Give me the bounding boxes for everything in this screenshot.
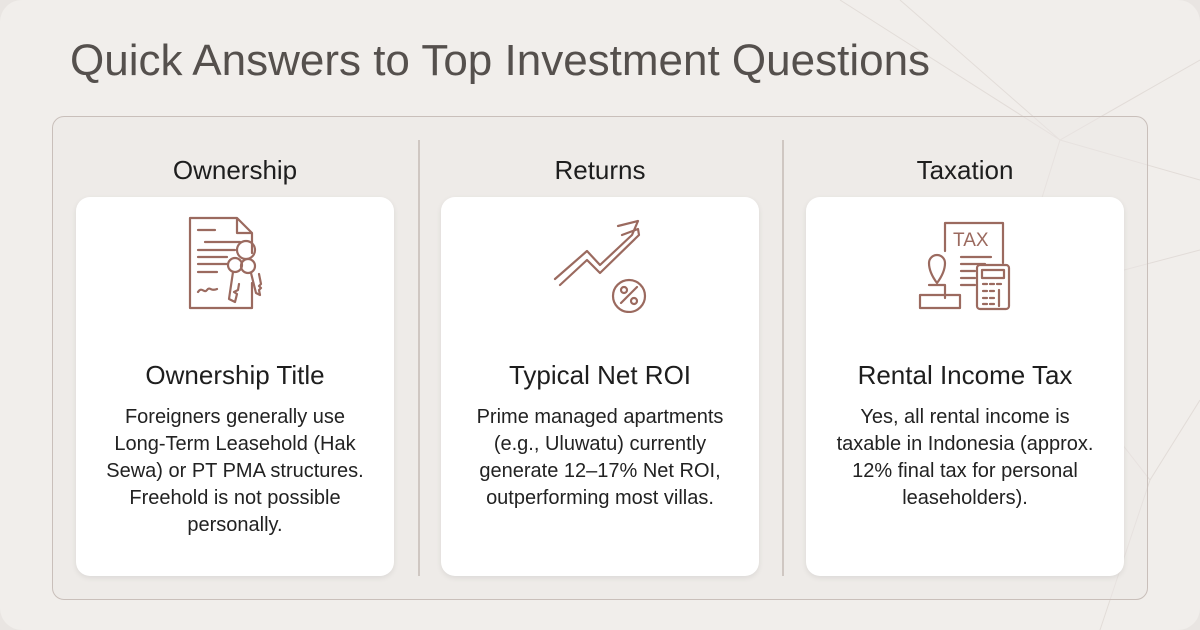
icon: rising arrow with percent [554,220,646,313]
title: Quick Answers to Top Investment Questions [70,36,930,85]
column: ownership [76,155,394,578]
card title: Rental Income Tax [858,360,1072,390]
icon: document with keys [188,216,262,310]
card: returns [441,197,759,576]
card: taxation [806,197,1124,576]
card text: Foreigners generally use Long-Term Leasehold (Hak Sewa) or PT PMA structures. Freehold is not possible personally. [106,406,364,536]
icon: tax form, stamp, calculator [918,222,1010,310]
card text: Prime managed apartments (e.g., Uluwatu) currently generate 12–17% Net ROI, outperforming most villas. [477,406,723,509]
column: returns [440,155,760,578]
card title: Ownership Title [145,360,325,390]
heading: returns: Returns [554,155,646,185]
card: ownership [76,197,394,576]
panel: main container [52,116,1148,600]
heading: taxation: Taxation [917,155,1013,185]
column: taxation [806,155,1124,578]
card title: Typical Net ROI [509,360,691,390]
heading: ownership: Ownership [173,155,297,185]
card text: Yes, all rental income is taxable in Indonesia (approx. 12% final tax for personal leaseholders). [837,406,1093,509]
icon: tax form, stamp, calculator: TAX [953,230,989,251]
